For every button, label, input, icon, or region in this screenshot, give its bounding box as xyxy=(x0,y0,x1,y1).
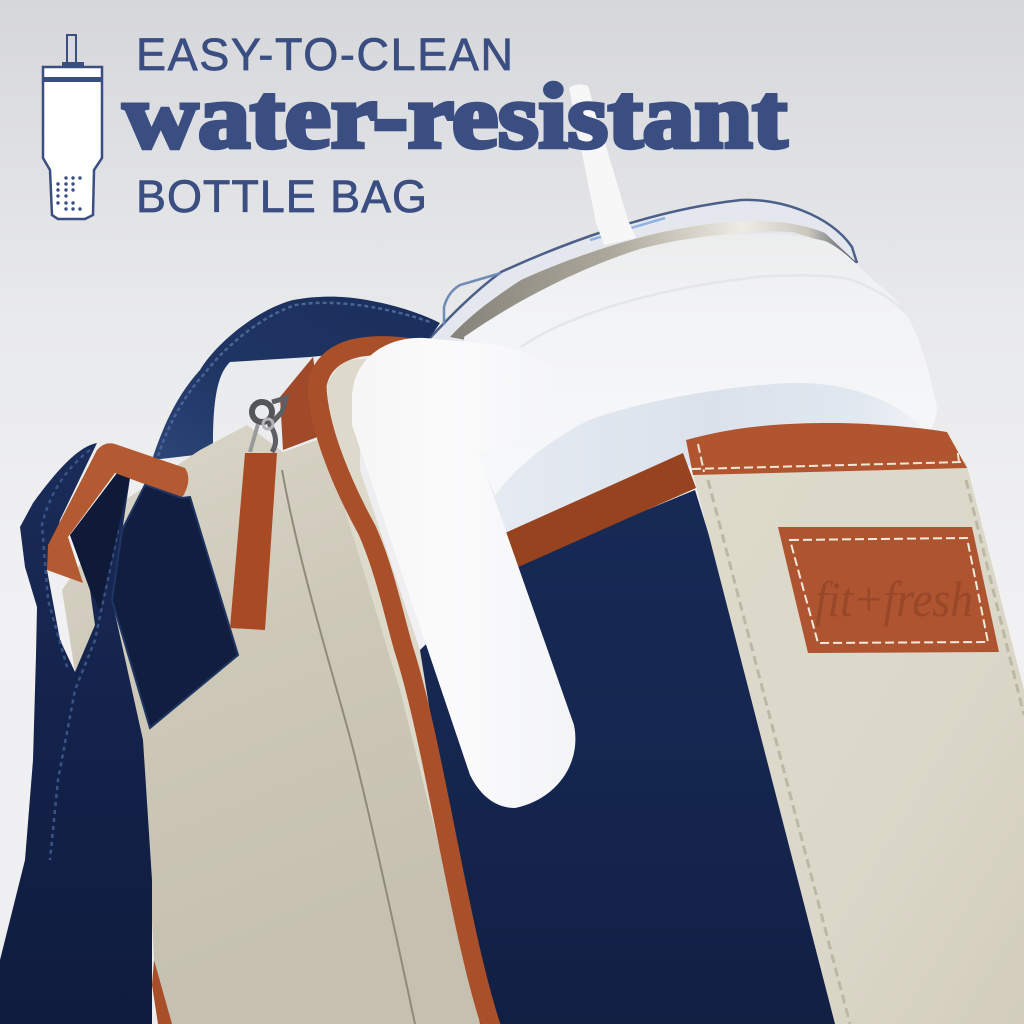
zipper pull xyxy=(230,398,286,630)
metal band xyxy=(450,221,857,340)
icon dots xyxy=(58,178,80,209)
shoulder strap arc xyxy=(152,297,440,460)
strap stitching xyxy=(42,450,118,860)
inner beige gusset xyxy=(327,358,470,960)
seam xyxy=(282,470,415,1024)
metal rings xyxy=(250,398,286,452)
rust buckle xyxy=(47,443,188,583)
title line three: BOTTLE BAG xyxy=(136,171,427,222)
clear lid xyxy=(430,200,857,345)
strap tab xyxy=(112,485,238,728)
title xyxy=(123,29,787,222)
lid handle loop xyxy=(444,273,501,325)
upper zipper gusset xyxy=(280,357,320,450)
shoulder ridge xyxy=(521,275,906,347)
right beige panel xyxy=(692,462,1024,1024)
leather patch xyxy=(778,527,999,653)
handle xyxy=(352,338,575,808)
mesh zipper tape xyxy=(505,453,696,568)
lid blue highlight xyxy=(590,218,665,240)
bottle straw xyxy=(569,84,636,245)
patch stitching xyxy=(790,538,988,643)
rust trim band xyxy=(686,423,967,475)
title line two: water-resistant xyxy=(123,65,787,167)
icon: tumbler xyxy=(43,35,102,219)
bag xyxy=(62,346,860,1024)
rust piping xyxy=(317,346,496,1024)
navy mesh pocket xyxy=(420,490,860,1024)
arc edge stitching xyxy=(158,303,430,456)
lid rim edge xyxy=(430,200,857,338)
title line one: EASY-TO-CLEAN xyxy=(136,29,513,80)
left strap xyxy=(0,443,152,1024)
leather tab xyxy=(230,453,277,630)
bottle xyxy=(430,200,937,540)
bottle body xyxy=(494,383,926,540)
panel stitching xyxy=(708,480,1024,1024)
strap dark inner band xyxy=(70,473,130,610)
lower rust edge xyxy=(152,960,172,1024)
brand wordmark: fit+fresh xyxy=(815,571,973,627)
white shoulder xyxy=(464,234,937,505)
main beige panel xyxy=(62,425,503,1024)
